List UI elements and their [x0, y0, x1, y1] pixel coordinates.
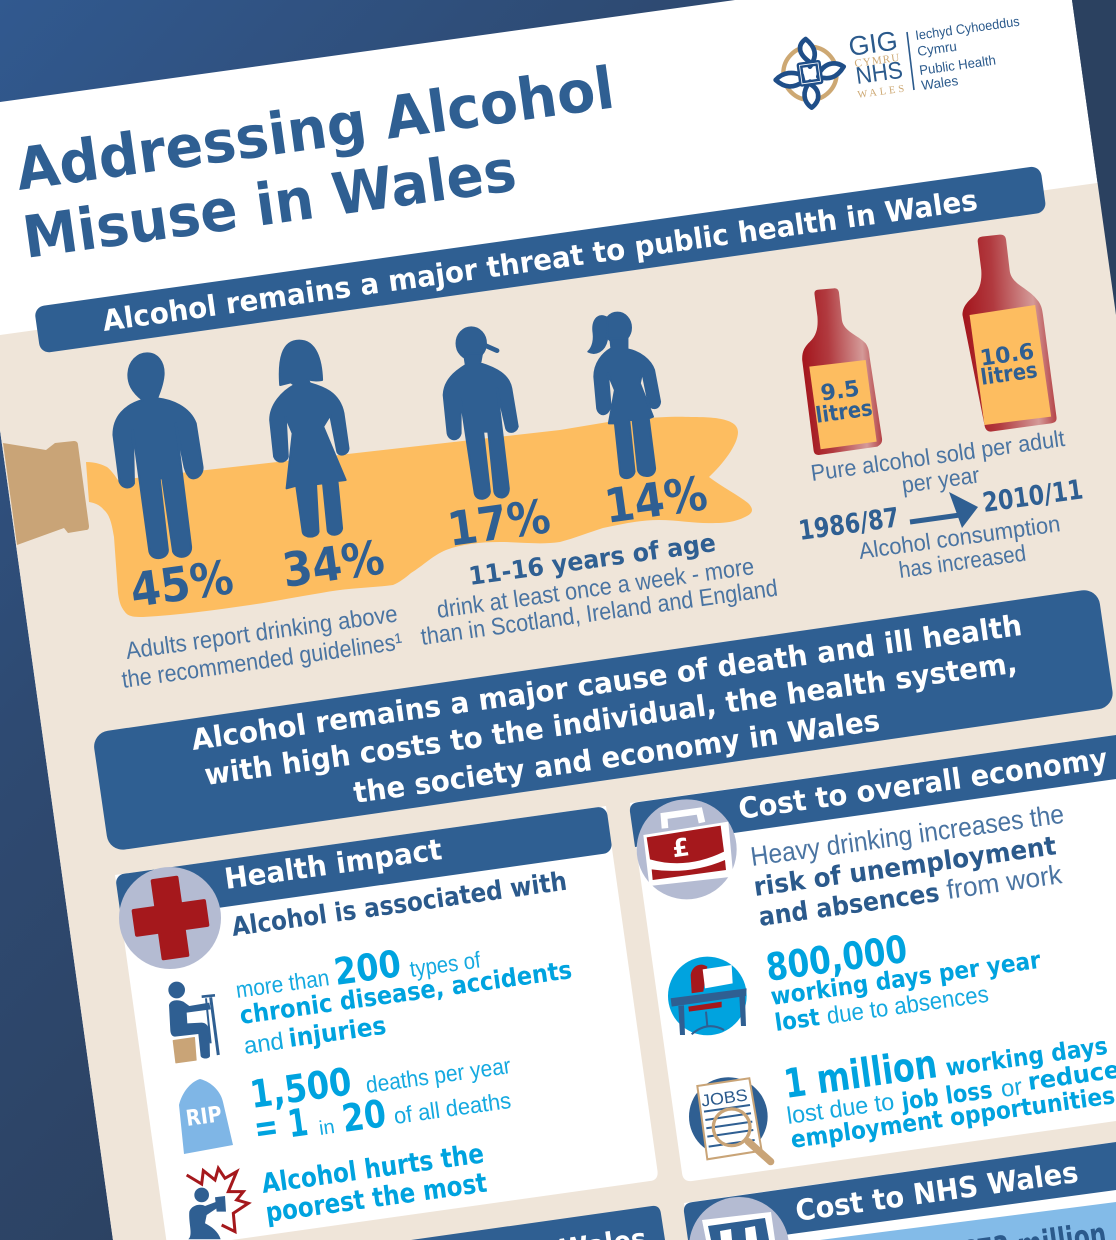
stat: 1,500 deaths: deaths per year [364, 1052, 513, 1098]
stat: hurts the poorest: poorest the most [264, 1168, 489, 1229]
banner: major cause of death: the society and economy in Wales [351, 703, 882, 810]
logo wordmark: NHS [854, 57, 904, 90]
stat: 200 types [234, 942, 574, 1060]
adult percentages: 34% [279, 530, 388, 599]
stat: hurts the poorest [260, 1138, 489, 1229]
logo wordmark: WALES [857, 84, 905, 101]
banner: major threat: Alcohol remains a major threat to public health in Wales [100, 183, 980, 338]
stat: 200 types: and [242, 1028, 285, 1060]
logo: Public Health Wales [776, 14, 1021, 108]
icon: girl with ponytail [588, 313, 660, 478]
icon: woman [270, 341, 348, 537]
adults caption: the recommended guidelines¹ [120, 628, 404, 694]
banner: major cause of death: with high costs to the individual, the health system, [202, 646, 1019, 792]
stat: 1 million working days: lost due to [785, 1088, 896, 1130]
adult percentages: 45% [127, 550, 237, 619]
title [12, 54, 618, 272]
stat: 200 types: injuries [287, 1011, 388, 1053]
stat: 800,000 working days: working days per year [769, 946, 1042, 1011]
stat: 1 million working days: job loss [899, 1076, 994, 1116]
stat: 1 million working days [781, 1032, 1116, 1154]
stat: 200 types: chronic disease, accidents [238, 955, 574, 1030]
banner: major cause of death [92, 588, 1115, 852]
text: heavy drinking: from work [945, 859, 1064, 905]
stat: 1,500 deaths: 1,500 [247, 1059, 354, 1117]
icon: gravestone: RIP [184, 1102, 223, 1132]
text: heavy drinking: and absences [757, 878, 941, 933]
bottle neck [3, 441, 89, 545]
icon: briefcase: £ [670, 832, 691, 863]
icon: red cross [119, 867, 221, 969]
icon: empty desk [668, 957, 747, 1035]
stat: 1,500 deaths: in [318, 1116, 336, 1140]
stat: 800,000 working days: lost [773, 1003, 821, 1037]
logo wordmark: CYMRU [854, 52, 900, 70]
youth percentages [444, 466, 711, 558]
bottle: 9.5 litres [802, 288, 882, 455]
icon: celtic knot [776, 39, 844, 108]
consumption caption: Alcohol consumption [857, 510, 1062, 564]
stat: 1,500 deaths [247, 1052, 513, 1151]
pure alcohol caption: Pure alcohol sold per adult [809, 425, 1067, 486]
stat: 200 types: more than [234, 964, 331, 1003]
stat: 800,000 working days: due to absences [825, 981, 990, 1030]
bottle: 10.6 litres: 10.6 [979, 339, 1036, 372]
pure alcohol caption: per year [900, 461, 981, 498]
title: Addressing Alcohol [12, 54, 618, 204]
consumption caption: has increased [897, 540, 1027, 583]
icon: jobs search [689, 1077, 771, 1162]
panel: health impact [115, 806, 658, 1240]
icon: violence [187, 1168, 248, 1239]
youth percentages: 14% [601, 466, 711, 535]
icon: boy with cap [444, 327, 518, 499]
icon: gravestone [179, 1079, 233, 1154]
panel: cost for Wales [411, 1206, 665, 1240]
stat: 800,000 working days [763, 927, 1042, 1037]
logo wordmark: Public Health [918, 53, 997, 78]
stat: 1,500 deaths: of all deaths [392, 1087, 513, 1129]
text: heavy drinking [749, 799, 1066, 933]
title: Misuse in Wales [19, 136, 520, 272]
text: heavy drinking: risk of unemployment [752, 831, 1058, 903]
text: heavy drinking: Heavy drinking increases the [749, 799, 1066, 872]
stat: hurts the poorest: Alcohol hurts the [260, 1138, 486, 1200]
banner: major cause of death: Alcohol remains a major cause of death and ill health [189, 608, 1024, 757]
adults caption [120, 601, 404, 694]
youth caption [419, 528, 779, 651]
stat: 1,500 deaths: = 1 [251, 1100, 311, 1151]
bar: light blue stat [820, 1202, 1116, 1240]
heading: cost to NHS Wales: Cost to NHS Wales [793, 1155, 1080, 1228]
youth caption: 11-16 years of age [467, 528, 717, 591]
spilled liquid [86, 417, 752, 617]
bottle: 10.6 litres: litres [979, 358, 1039, 391]
logo wordmark: Wales [920, 73, 959, 93]
stat: 1 million working days: or [999, 1073, 1024, 1103]
icon: person on crutches [168, 982, 218, 1063]
years and arrow: 1986/87 [797, 502, 901, 547]
heading: health impact: Health impact [222, 832, 444, 896]
icon: jobs search: JOBS [700, 1085, 749, 1111]
stat: 1,500 deaths: 20 [339, 1091, 389, 1141]
years and arrow: 2010/11 [981, 474, 1085, 519]
icon: hospital [690, 1197, 788, 1240]
stat: 1 million working days: 1 million [781, 1041, 940, 1108]
right page edge shade [1072, 0, 1116, 315]
bottle: 9.5 litres: litres [814, 396, 874, 429]
logo wordmark: Iechyd Cyhoeddus [914, 14, 1021, 43]
stat: 800,000 working days: 800,000 [763, 927, 910, 990]
icon: briefcase [637, 799, 737, 899]
bottle: 9.5 litres: 9.5 [819, 377, 861, 407]
subheading: Alcohol is associated with [230, 867, 569, 943]
panel: cost to overall economy [630, 735, 1116, 1181]
years and arrow [797, 474, 1085, 547]
adults caption: Adults report drinking above [124, 601, 399, 665]
youth caption: than in Scotland, Ireland and England [419, 575, 779, 651]
bottle: 10.6 litres [962, 235, 1057, 432]
logo wordmark [847, 14, 1021, 101]
logo wordmark: Cymru [916, 39, 958, 59]
youth percentages: 17% [444, 489, 554, 558]
stat: 200 types: 200 [331, 942, 404, 994]
logo wordmark: GIG [847, 25, 899, 62]
youth caption: drink at least once a week - more [435, 553, 756, 624]
adult percentages [127, 530, 388, 619]
panel: cost to NHS Wales [684, 1142, 1116, 1240]
stat: 200 types: types of [408, 946, 483, 982]
icon: man [114, 353, 203, 558]
